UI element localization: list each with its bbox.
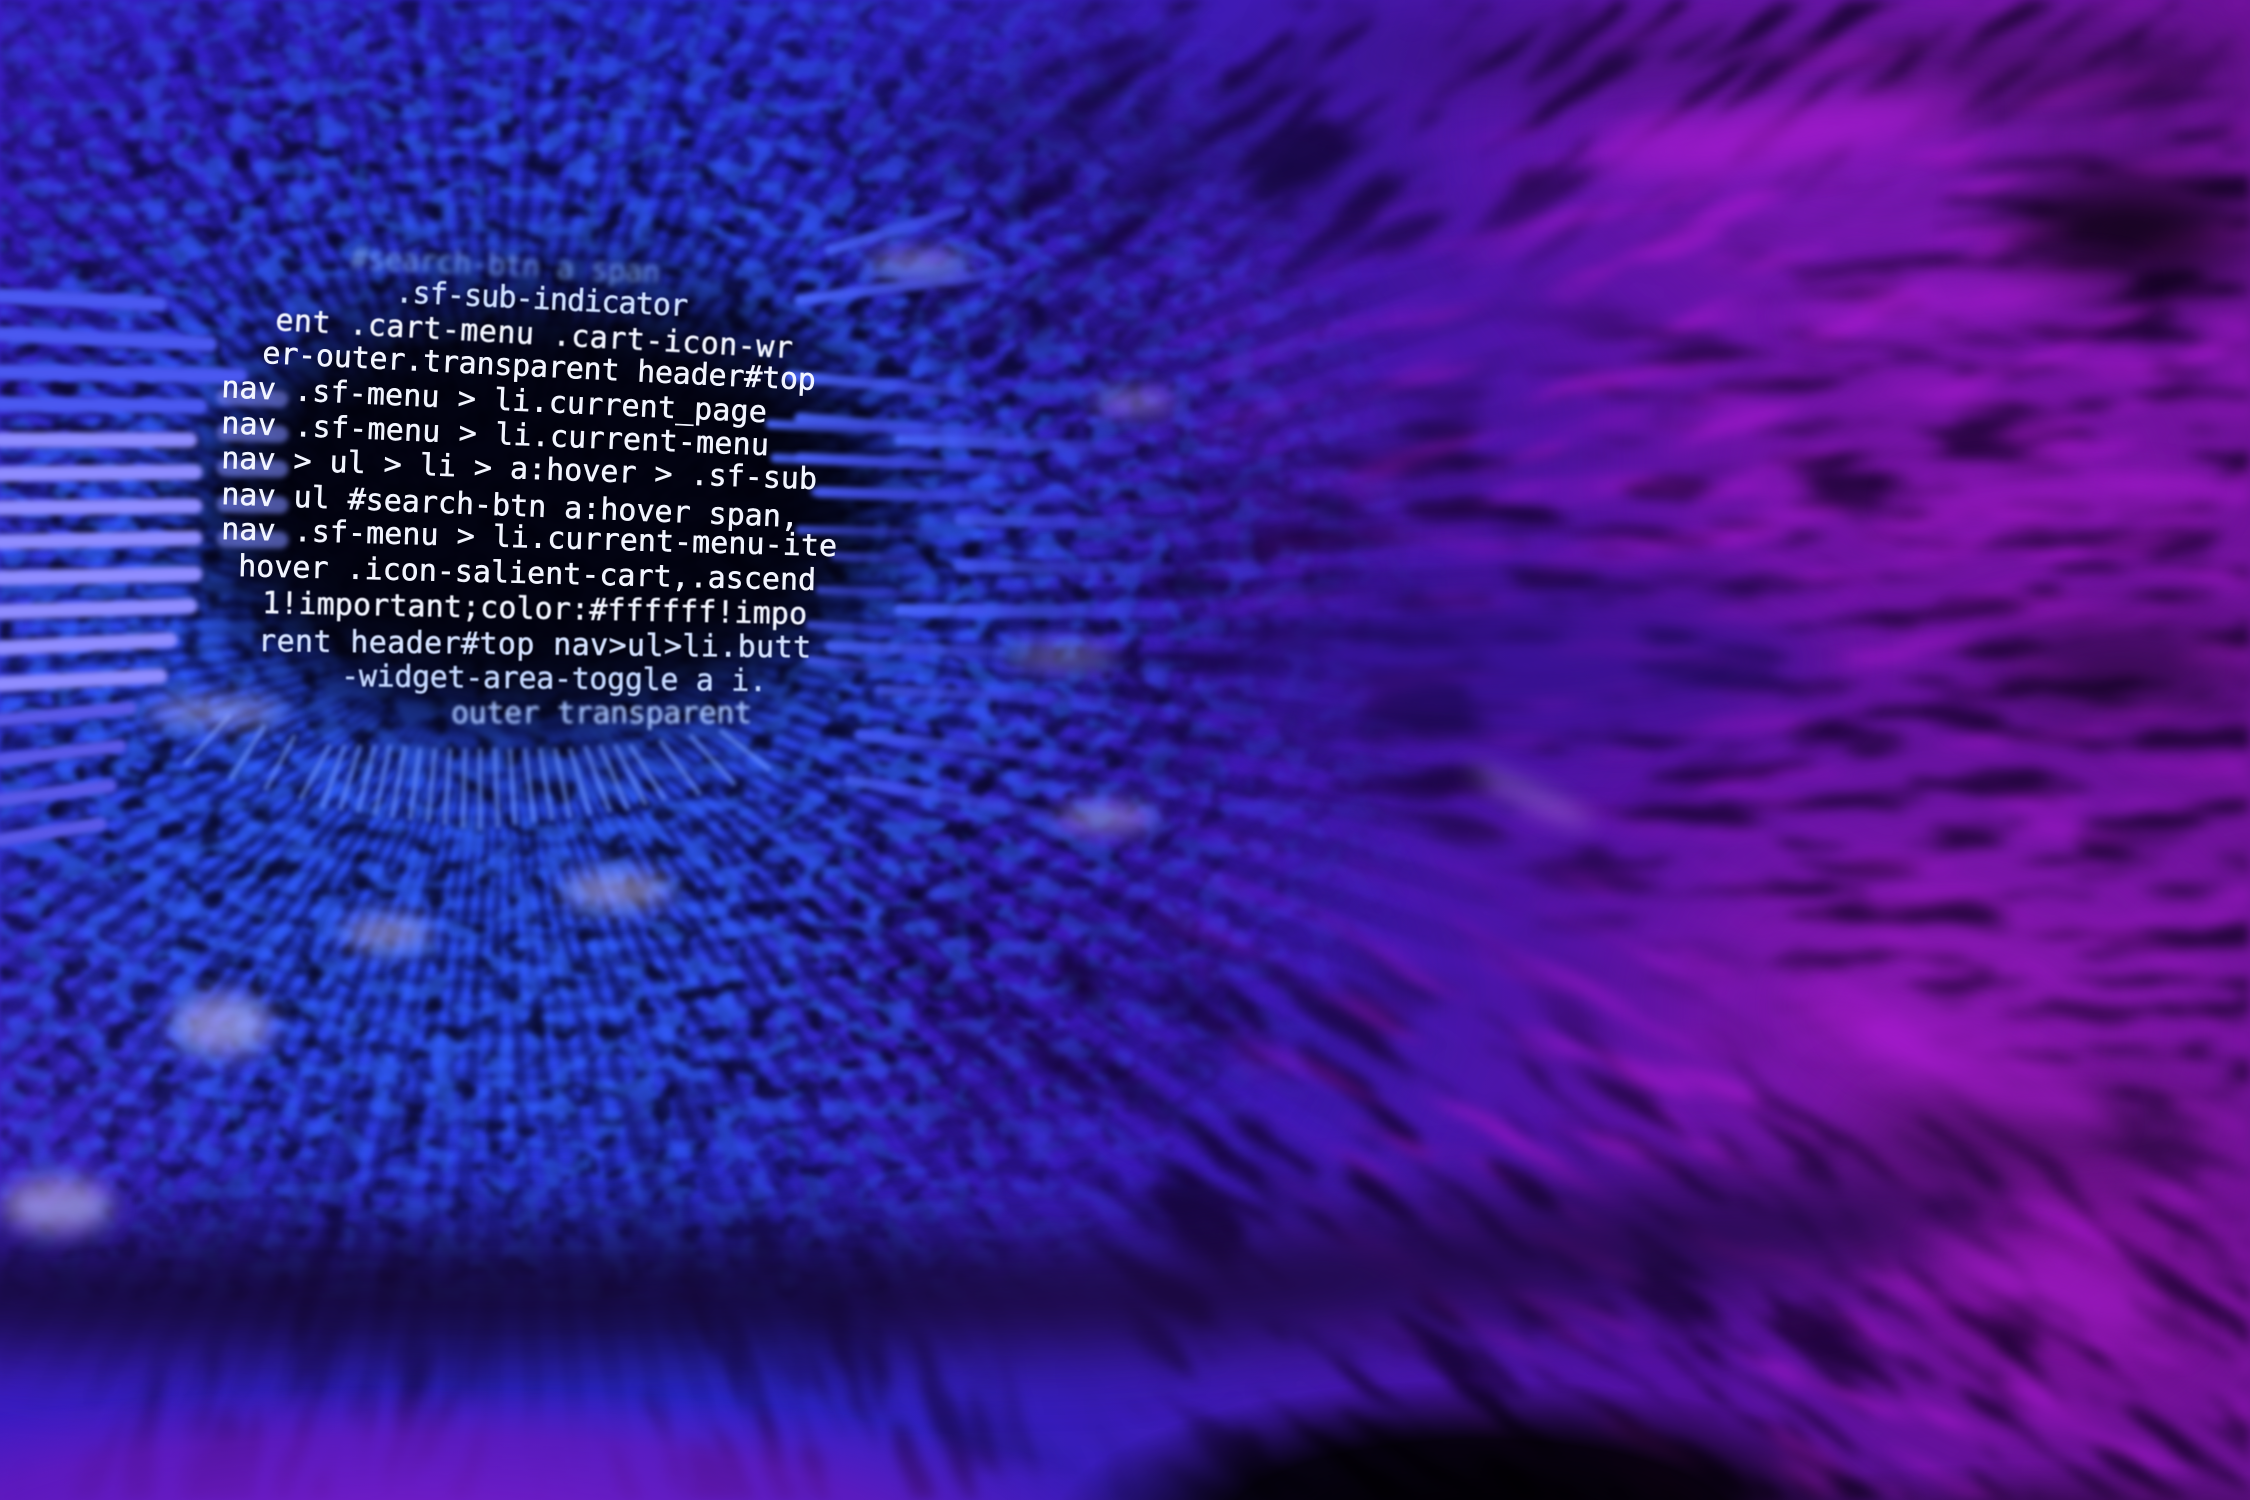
dark screen behind sharp text: [200, 280, 890, 730]
code text: [221, 241, 838, 731]
code text: er-outer.transparent header#top: [262, 336, 817, 398]
radial zoom streaks: [0, 0, 1544, 1418]
code text: outer transparent: [451, 696, 752, 731]
code text: hover .icon-salient-cart,.ascend: [238, 549, 816, 598]
concentric rows of blurred characters: [0, 0, 1354, 1240]
code text: nav ul #search-btn a:hover span,: [221, 477, 800, 535]
radial streaks below the text: [185, 715, 770, 830]
code text: nav .sf-menu > li.current-menu-ite: [221, 512, 838, 564]
soft highlights: [2, 253, 1598, 1233]
right horizontal streaks: [770, 210, 1180, 815]
left horizontal streaks: [0, 296, 280, 840]
code text: -widget-area-toggle a i.: [341, 659, 767, 699]
code text: .sf-sub-indicator: [395, 275, 689, 324]
code text: rent header#top nav>ul>li.butt: [258, 624, 811, 665]
code text: 1!important;color:#ffffff!impo: [262, 586, 807, 632]
code text: nav .sf-menu > li.current-menu: [221, 406, 770, 463]
code text: nav .sf-menu > li.current_page: [221, 370, 768, 430]
code text: #search-btn a span: [350, 241, 661, 291]
code text: ent .cart-menu .cart-icon-wr: [275, 303, 794, 366]
code text: nav > ul > li > a:hover > .sf-sub: [221, 441, 818, 497]
